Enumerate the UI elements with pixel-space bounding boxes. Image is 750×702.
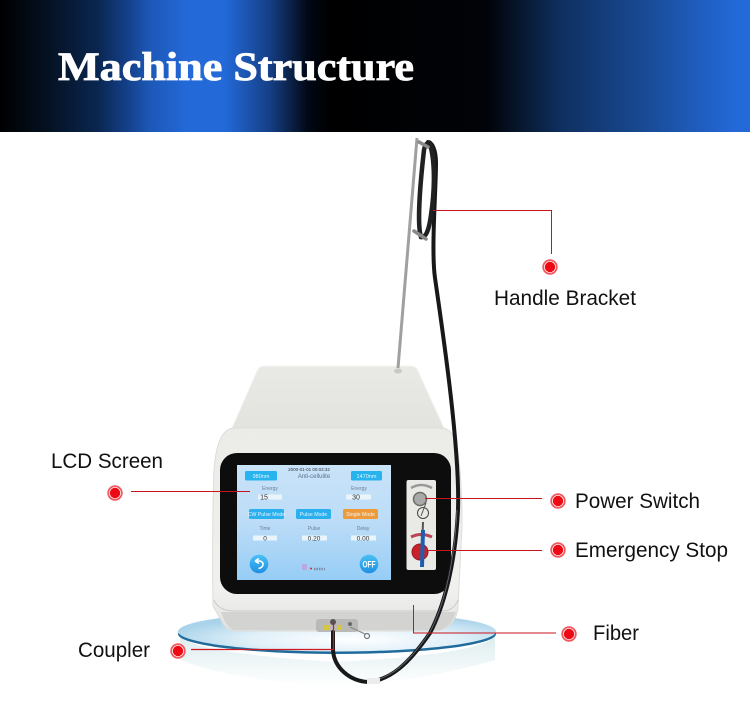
machine top panel: [231, 366, 445, 430]
callout: LCD screen: LCD Screen: [51, 450, 163, 473]
signal icon: [302, 564, 325, 570]
coupler port: [316, 619, 370, 638]
timing controls: Time: [260, 526, 271, 532]
machine body: [213, 428, 462, 631]
energy controls: 30: [352, 494, 360, 502]
callout: power switch: [425, 490, 700, 513]
screen title: 2000-01-01 00:03:32: [288, 467, 330, 472]
callout: handle bracket: [433, 210, 636, 310]
header banner: [0, 0, 750, 132]
timing controls: Pulse: [308, 526, 320, 532]
screen title: [288, 467, 331, 480]
callout: LCD screen: [51, 450, 250, 500]
energy controls: Energy: [262, 486, 278, 492]
title: Machine Structure: [58, 44, 414, 89]
wavelength buttons: 1470nm: [357, 474, 377, 480]
callout: emergency stop: Emergency Stop: [575, 539, 728, 562]
energy controls: [258, 486, 371, 502]
handle bracket rod: [394, 138, 417, 374]
emergency stop button: [411, 522, 432, 567]
callout: handle bracket: Handle Bracket: [494, 287, 636, 310]
timing controls: [253, 526, 376, 542]
callout: coupler: Coupler: [78, 639, 150, 662]
fiber cable: [333, 142, 458, 684]
off button: OFF: [362, 560, 376, 570]
timing controls: 0.20: [308, 536, 321, 542]
front bezel: [220, 453, 451, 594]
timing controls: Delay: [357, 526, 370, 532]
callout: fiber: [414, 605, 639, 645]
off button: [360, 555, 378, 573]
screen title: Anti-cellulite: [298, 474, 331, 480]
wavelength buttons: [245, 471, 382, 480]
back button: [250, 555, 268, 573]
LCD screen: [237, 465, 391, 580]
energy controls: 15: [260, 494, 268, 502]
callout: coupler: [78, 622, 334, 662]
callout: fiber: Fiber: [593, 622, 639, 645]
mode buttons: CW Pulse Mode: [248, 512, 285, 518]
timing controls: 0: [263, 536, 267, 542]
energy controls: Energy: [351, 486, 367, 492]
timing controls: 0.00: [357, 536, 370, 542]
callout: emergency stop: [428, 539, 728, 562]
control panel: [406, 480, 436, 570]
machine: laser unit: [213, 366, 462, 638]
power key switch: [411, 485, 432, 518]
mode buttons: Single Mode: [346, 512, 375, 518]
glass display platform: [178, 612, 496, 686]
mode buttons: Pulse Mode: [300, 512, 327, 518]
wavelength buttons: 980nm: [253, 474, 270, 480]
callout: power switch: Power Switch: [575, 490, 700, 513]
mode buttons: [248, 509, 378, 519]
